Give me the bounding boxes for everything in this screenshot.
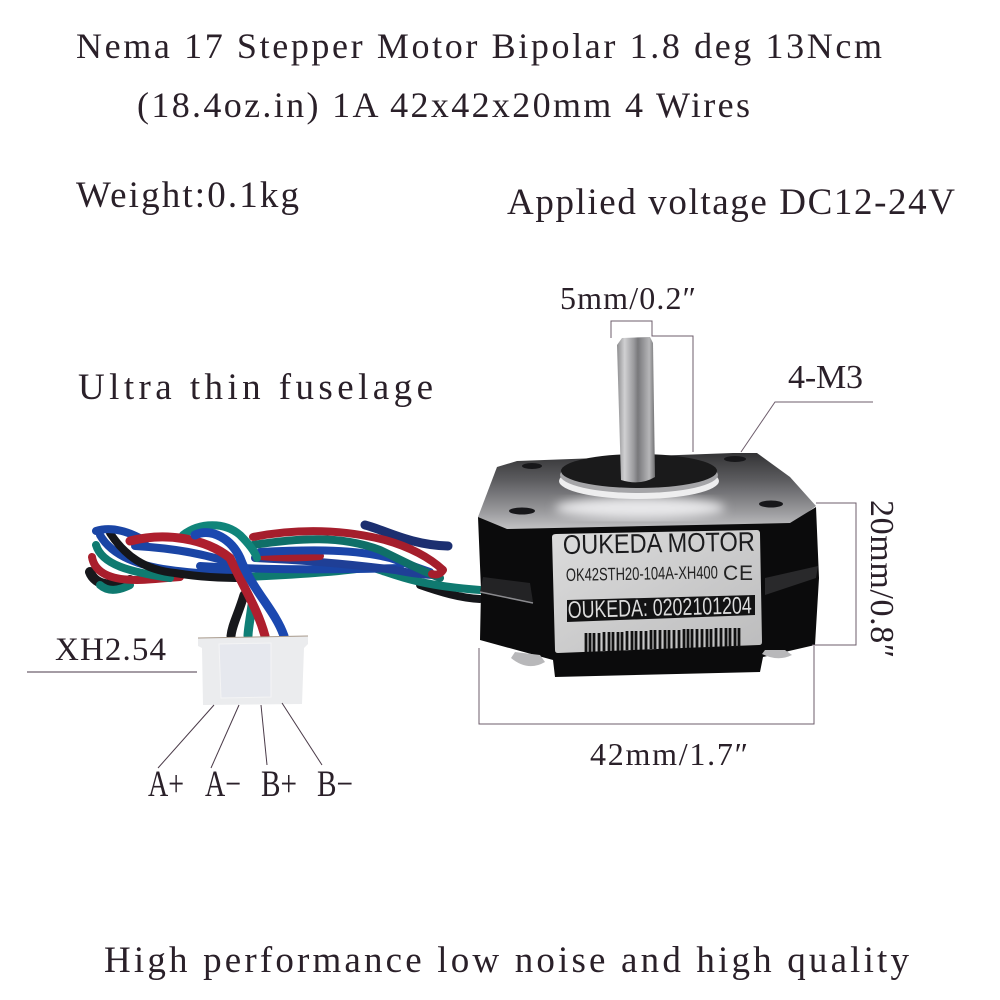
- flange boss: [559, 463, 719, 499]
- motor body: [478, 507, 819, 677]
- title: Nema 17 Stepper Motor Bipolar 1.8 deg 13Ncm: [76, 26, 882, 66]
- height dimension label: 20mm/0.8″: [863, 500, 900, 658]
- barcode: [586, 628, 739, 652]
- wire bundle: [90, 525, 480, 636]
- serial strip: [567, 595, 755, 622]
- width dimension label: 42mm/1.7″: [590, 736, 748, 772]
- footer tagline: High performance low noise and high quality: [104, 940, 910, 981]
- mount hole label: 4-M3: [788, 359, 863, 396]
- motor top plate: [478, 453, 816, 530]
- motor: CE: [723, 562, 753, 585]
- plate reflection: [555, 497, 725, 519]
- connector leader lines: [27, 672, 322, 768]
- pin labels: A−: [205, 764, 241, 805]
- product label: [552, 530, 762, 653]
- mount feet: [511, 652, 545, 666]
- weight text: Weight:0.1kg: [76, 175, 299, 216]
- connector: [198, 636, 308, 705]
- pin labels: A+: [148, 764, 184, 805]
- feature text: Ultra thin fuselage: [78, 367, 433, 408]
- motor: [478, 337, 819, 677]
- title: (18.4oz.in) 1A 42x42x20mm 4 Wires: [137, 85, 750, 125]
- connector type label: XH2.54: [55, 632, 166, 668]
- shaft dimension label: 5mm/0.2″: [560, 280, 696, 316]
- shaft: [617, 337, 655, 482]
- pin labels: B+: [261, 764, 297, 805]
- voltage text: Applied voltage DC12-24V: [507, 182, 955, 223]
- mount holes: [509, 456, 783, 514]
- title: [76, 26, 882, 125]
- motor seam highlights: [480, 577, 533, 602]
- dimension lines: [479, 321, 873, 724]
- motor: OK42STH20-104A-XH400: [566, 562, 718, 585]
- motor: OUKEDA: 0202101204: [567, 592, 752, 624]
- pin labels: [148, 764, 353, 805]
- pin labels: B−: [317, 764, 353, 805]
- motor: OUKEDA MOTOR: [563, 527, 755, 560]
